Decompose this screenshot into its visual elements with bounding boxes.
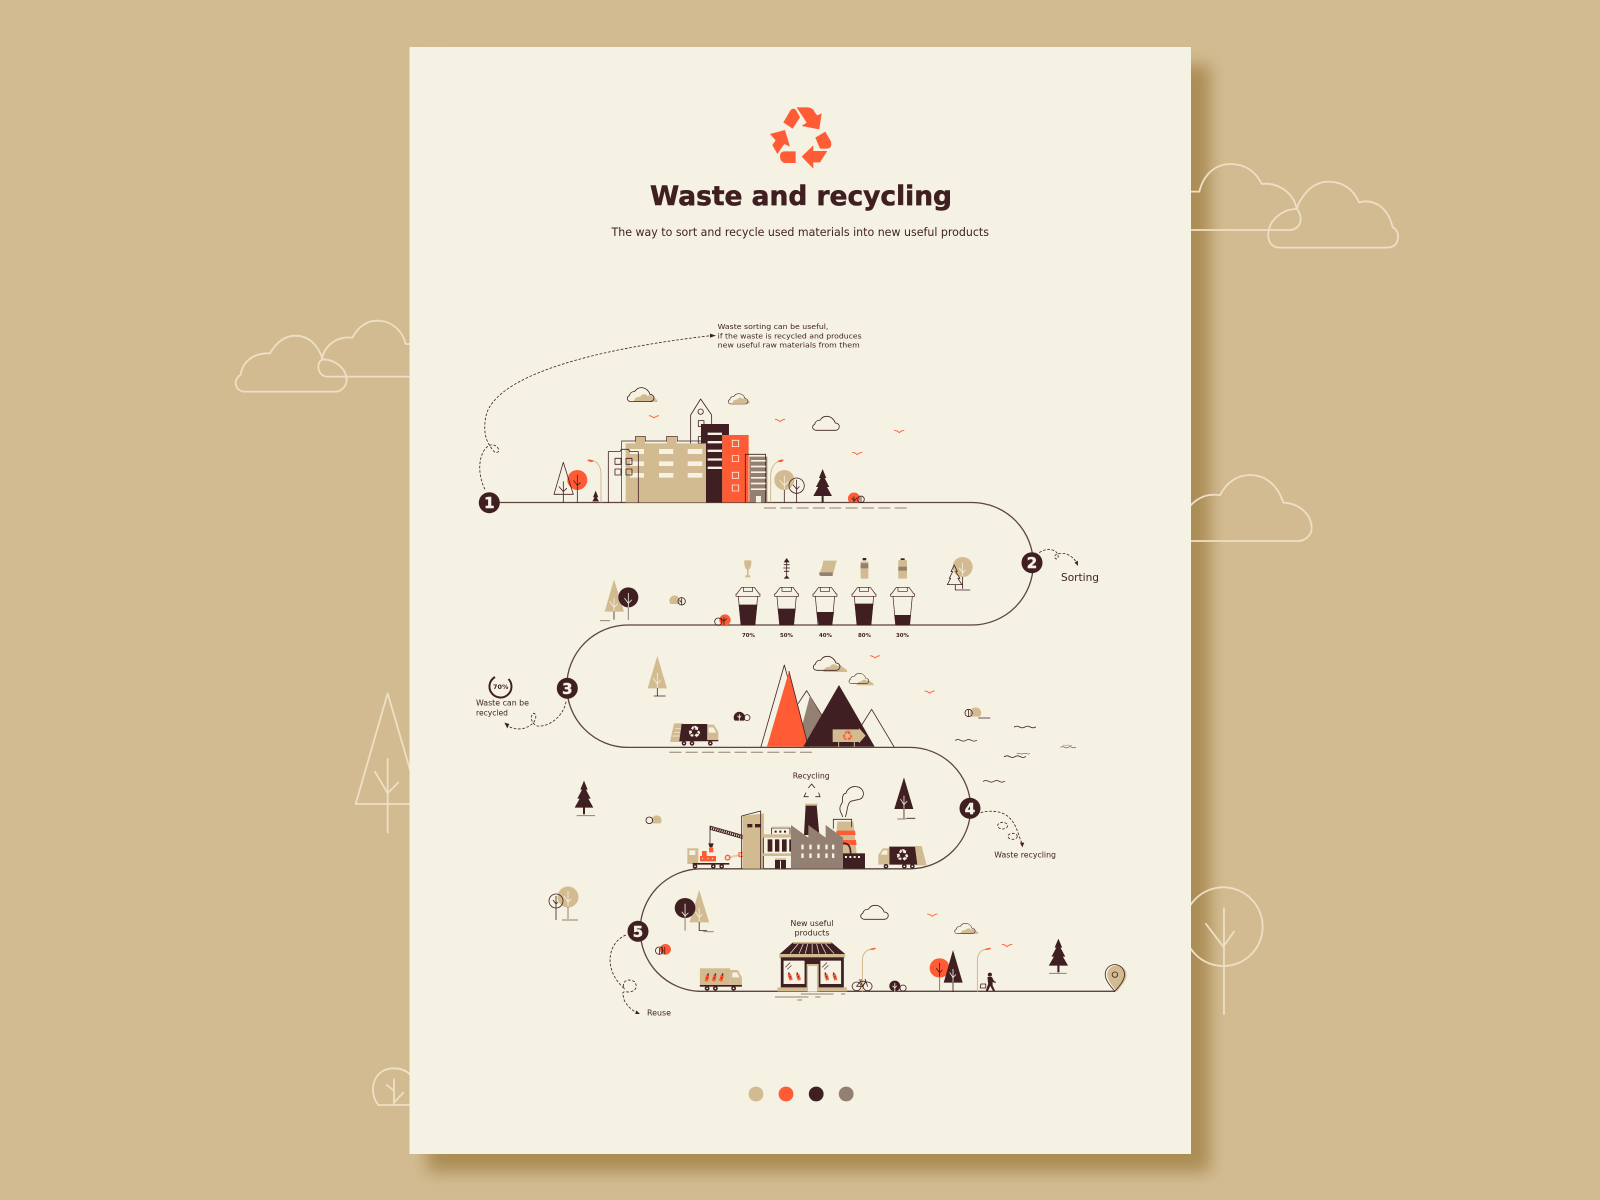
- step 2 badge: [1022, 552, 1042, 573]
- card shadow: [427, 65, 1210, 1172]
- step 4 illustration: factory: [687, 777, 1024, 869]
- buildings: [608, 399, 767, 502]
- background decoration: round tree: [1184, 887, 1263, 1014]
- bin percentages: 70%: [742, 633, 756, 639]
- step 4 badge: [960, 798, 980, 819]
- cooling tower and smoke: [833, 787, 863, 853]
- step 4 far left pine and bush: [575, 781, 662, 824]
- birds: [870, 656, 935, 693]
- mountains: [761, 665, 894, 747]
- step 1 badge: 1: [484, 494, 495, 512]
- reuse dashed arrow: [610, 935, 640, 1014]
- step 4 badge: 4: [965, 800, 975, 818]
- label: recycling: Recycling: [793, 771, 830, 781]
- road dashes: [669, 751, 812, 754]
- pine: [1049, 939, 1068, 973]
- poster card: [410, 47, 1191, 1154]
- birds: [649, 416, 904, 455]
- clouds and birds: [861, 905, 1012, 947]
- background decoration: large triangle tree: [356, 693, 420, 833]
- callout text: new useful raw materials from them: [718, 341, 860, 350]
- recycling triangle outline: [804, 784, 820, 797]
- step 1 badge: [479, 492, 500, 513]
- label: waste recycling: Waste recycling: [994, 851, 1056, 860]
- gauge: 70% waste can be recycled: 70%: [493, 683, 509, 691]
- callout text: if the waste is recycled and produces: [718, 331, 862, 340]
- step 2 badge: 2: [1027, 554, 1037, 572]
- colour palette dots: [749, 1087, 854, 1101]
- garbage truck: [670, 723, 718, 746]
- trees near start: [655, 890, 714, 955]
- gauge: 70% waste can be recycled: Waste can be: [476, 699, 529, 708]
- callout text: [718, 322, 862, 350]
- step 4 wave: [983, 780, 1005, 782]
- step 3 badge: [557, 678, 578, 699]
- bush: [734, 712, 750, 721]
- road dashes: [764, 506, 907, 509]
- left trees and lamp: [554, 459, 601, 502]
- delivery truck: [700, 968, 742, 991]
- step 1 illustration: city: [480, 334, 907, 508]
- bin percentages: [742, 633, 910, 639]
- background decoration: right clouds: [1183, 164, 1398, 248]
- factory with chimney: [791, 804, 865, 869]
- bins: [736, 587, 915, 625]
- sorting dashed arrow: [1039, 549, 1078, 566]
- label: sorting: Sorting: [1061, 572, 1099, 584]
- step 5 illustration: shop: [610, 890, 1127, 1014]
- far bush and waves: [955, 707, 1076, 757]
- step 2 illustration: sorting bins: [600, 549, 1078, 625]
- trees left of step 5: [549, 886, 578, 920]
- callout dashed arrow: [480, 334, 716, 489]
- clouds: [813, 656, 874, 685]
- step 5 badge: 5: [633, 923, 643, 941]
- shop: [775, 942, 847, 1000]
- step 3 dashed arrow: [504, 702, 566, 729]
- label: reuse: Reuse: [647, 1009, 671, 1018]
- right tree: [947, 557, 973, 590]
- dark tree: [894, 777, 915, 819]
- bush: [889, 981, 906, 991]
- label: new useful products: products: [794, 928, 830, 937]
- background decoration: left clouds: [236, 321, 417, 392]
- step 4 dashed arrow: [981, 811, 1024, 847]
- office building: [762, 827, 799, 869]
- bin percentages: 80%: [858, 633, 872, 639]
- left trees and bushes: [600, 579, 731, 625]
- winding road path: [489, 502, 1115, 991]
- background decoration: small round tree: [373, 1068, 417, 1105]
- tall tan building: [742, 811, 764, 869]
- right trees and lamp: [771, 460, 864, 503]
- label: new useful products: New useful: [790, 919, 834, 928]
- lamp and bicycle: [852, 948, 876, 992]
- bin percentages: 30%: [896, 633, 910, 639]
- label: new useful products: [790, 919, 834, 937]
- clouds: [627, 388, 839, 430]
- garbage truck right: [878, 846, 927, 869]
- flatbed truck with crane: [687, 826, 744, 869]
- lamp and pedestrian: [977, 948, 996, 992]
- subtitle: The way to sort and recycle used materials into new useful products: [611, 225, 989, 239]
- orange and dark trees: [930, 950, 963, 992]
- icon: recycling symbol: [770, 107, 831, 169]
- icon: destination pin: [1105, 965, 1127, 992]
- step 5 badge: [628, 921, 648, 942]
- callout text: Waste sorting can be useful,: [718, 322, 828, 331]
- sign with recycling arrow: [833, 728, 866, 747]
- title: Waste and recycling: [650, 181, 952, 212]
- bin percentages: 50%: [780, 633, 794, 639]
- bin percentages: 40%: [819, 633, 833, 639]
- step 3 badge: 3: [562, 680, 573, 698]
- waste icons: [744, 558, 907, 579]
- background decoration: right cloud: [1183, 475, 1312, 541]
- gauge: 70% waste can be recycled: [476, 677, 529, 717]
- tree: [648, 656, 667, 696]
- gauge: 70% waste can be recycled: recycled: [476, 708, 508, 717]
- step 3 illustration: transport to mountains: [648, 656, 1076, 757]
